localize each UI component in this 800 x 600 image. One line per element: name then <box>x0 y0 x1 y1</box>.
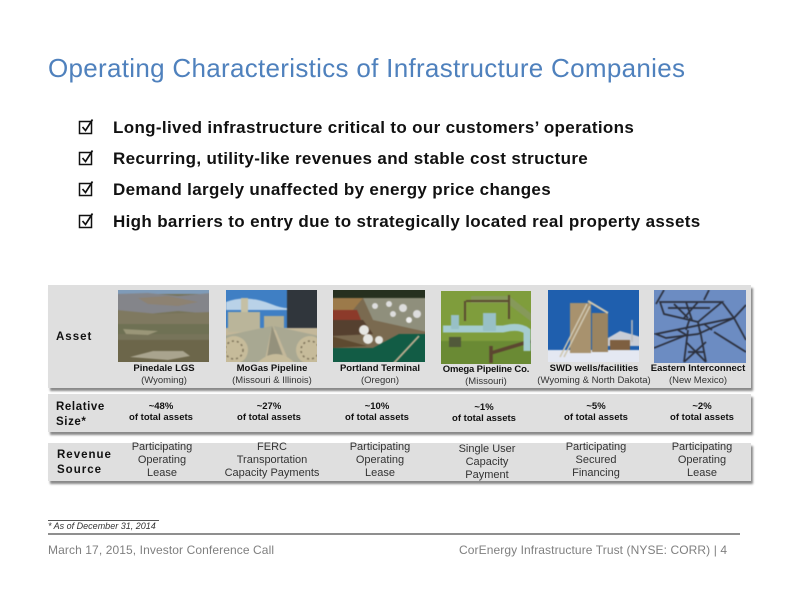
photo: Portland Terminal <box>333 290 425 362</box>
size: Pinedale: ~48% <box>149 401 173 412</box>
photo: MoGas Pipeline <box>226 290 317 362</box>
revenue: Portland: Operating <box>356 454 404 466</box>
size: Portland: ~10% <box>365 401 389 412</box>
footer right text: CorEnergy Infrastructure Trust (NYSE: CORR) | 4 <box>459 543 727 557</box>
revenue: Pinedale: Lease <box>147 467 177 479</box>
revenue: MoGas: Transportation <box>237 454 307 466</box>
revenue: Portland: Lease <box>365 467 395 479</box>
revenue: SWD <box>566 441 626 479</box>
caption: Eastern Interconnect: Eastern Interconnect <box>651 363 745 374</box>
revenue source label: Source <box>57 464 102 476</box>
size: SWD: ~5% <box>586 401 606 412</box>
revenue source label <box>57 449 112 476</box>
revenue: Omega: Payment <box>465 469 509 481</box>
asset row label: Asset <box>56 331 92 343</box>
revenue: Pinedale <box>132 441 192 479</box>
caption: MoGas Pipeline: (Missouri & Illinois) <box>232 375 312 386</box>
size: Portland <box>345 401 409 423</box>
revenue: Omega: Single User <box>459 443 515 455</box>
revenue: MoGas: Capacity Payments <box>225 467 319 479</box>
revenue: SWD: Secured <box>576 454 616 466</box>
footer left text: March 17, 2015, Investor Conference Call <box>48 543 274 557</box>
size: SWD: of total assets <box>564 412 628 423</box>
bullet 4: High barriers to entry due to strategically located real property assets <box>113 212 701 231</box>
photo: SWD wells <box>548 290 639 362</box>
relative size label: Size* <box>56 416 86 428</box>
caption: Portland Terminal <box>340 363 420 386</box>
size: SWD <box>564 401 628 423</box>
size: Portland: of total assets <box>345 412 409 423</box>
title: Operating Characteristics of Infrastructure Companies <box>48 53 685 83</box>
caption: Omega Pipeline Co.: Omega Pipeline Co. <box>443 364 529 375</box>
bullet 2: Recurring, utility-like revenues and stable cost structure <box>113 149 588 168</box>
caption: Pinedale LGS <box>133 363 195 386</box>
revenue: Eastern: Participating <box>672 441 732 453</box>
revenue: Eastern <box>672 441 732 479</box>
revenue: Portland <box>350 441 410 479</box>
revenue: Omega <box>459 443 516 481</box>
caption: MoGas Pipeline: MoGas Pipeline <box>237 363 307 374</box>
panel: relative size row <box>48 394 751 432</box>
photo: Pinedale LGS <box>118 290 209 362</box>
caption: SWD wells/facilities: (Wyoming & North Dakota) <box>537 375 651 386</box>
size: MoGas: of total assets <box>237 412 301 423</box>
revenue: SWD: Financing <box>572 467 620 479</box>
panel: asset row <box>48 285 751 388</box>
size: Omega: of total assets <box>452 413 516 424</box>
revenue: Eastern: Operating <box>678 454 726 466</box>
footer rule <box>48 533 740 535</box>
bullet list <box>78 118 701 231</box>
size: MoGas <box>237 401 301 423</box>
revenue: SWD: Participating <box>566 441 626 453</box>
caption: Portland Terminal: Portland Terminal <box>340 363 420 374</box>
revenue: Omega: Capacity <box>466 456 508 468</box>
caption: MoGas Pipeline <box>232 363 312 386</box>
caption: SWD wells/facilities: SWD wells/facilities <box>550 363 638 374</box>
footnote: * As of December 31, 2014 <box>48 521 156 531</box>
relative size label: Relative <box>56 401 105 413</box>
bullet 3: Demand largely unaffected by energy price changes <box>113 180 551 199</box>
caption: Eastern Interconnect: (New Mexico) <box>669 375 727 386</box>
revenue: Eastern: Lease <box>687 467 717 479</box>
caption: Omega Pipeline Co. <box>443 364 529 387</box>
caption: Eastern Interconnect <box>651 363 746 386</box>
revenue: MoGas <box>225 441 319 479</box>
size: MoGas: ~27% <box>257 401 281 412</box>
caption: Portland Terminal: (Oregon) <box>361 375 399 386</box>
size: Pinedale <box>129 401 193 423</box>
revenue source label: Revenue <box>57 449 112 461</box>
revenue: Pinedale: Operating <box>138 454 186 466</box>
size: Omega <box>452 402 516 424</box>
revenue: Pinedale: Participating <box>132 441 192 453</box>
size: Eastern <box>670 401 734 423</box>
size: Eastern: ~2% <box>692 401 712 412</box>
relative size label <box>56 401 105 428</box>
revenue: MoGas: FERC <box>257 441 287 453</box>
revenue: Portland: Participating <box>350 441 410 453</box>
panel: revenue source row <box>48 443 751 481</box>
caption: Pinedale LGS: Pinedale LGS <box>133 363 195 374</box>
caption: Omega Pipeline Co.: (Missouri) <box>465 376 507 387</box>
photo: Omega Pipeline <box>441 291 531 364</box>
bullet 1: Long-lived infrastructure critical to our customers’ operations <box>113 118 634 137</box>
caption: Pinedale LGS: (Wyoming) <box>141 375 187 386</box>
size: Pinedale: of total assets <box>129 412 193 423</box>
photo: Eastern Interconnect <box>654 290 746 363</box>
size: Omega: ~1% <box>474 402 494 413</box>
caption: SWD wells/facilities <box>537 363 651 386</box>
size: Eastern: of total assets <box>670 412 734 423</box>
